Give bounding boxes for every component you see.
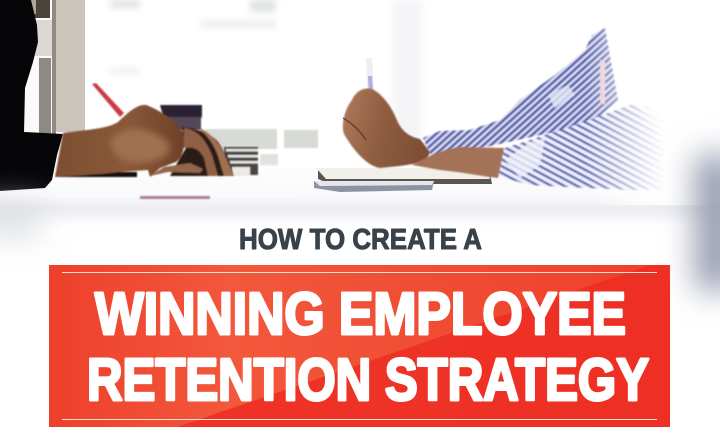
title line 1: WINNING EMPLOYEE xyxy=(95,281,626,347)
subtitle: HOW TO CREATE A xyxy=(239,224,482,256)
photo: red pen xyxy=(92,83,124,117)
banner bottom rule xyxy=(62,419,657,420)
photo: left hands xyxy=(55,105,234,177)
banner top rule xyxy=(62,272,657,273)
photo: right person shirt xyxy=(423,28,680,190)
banner gloss xyxy=(49,265,650,427)
photo: right hands, pen and notebook xyxy=(314,58,504,192)
photo: person on the left in dark jacket xyxy=(0,0,63,191)
banner background xyxy=(49,265,670,427)
title banner xyxy=(49,265,670,427)
photo: coffee cup and coin stack xyxy=(160,105,258,176)
photo: white fog and blurred shoulder on the right xyxy=(0,0,720,290)
photo: table xyxy=(0,166,720,226)
photo: window frame xyxy=(25,0,85,135)
